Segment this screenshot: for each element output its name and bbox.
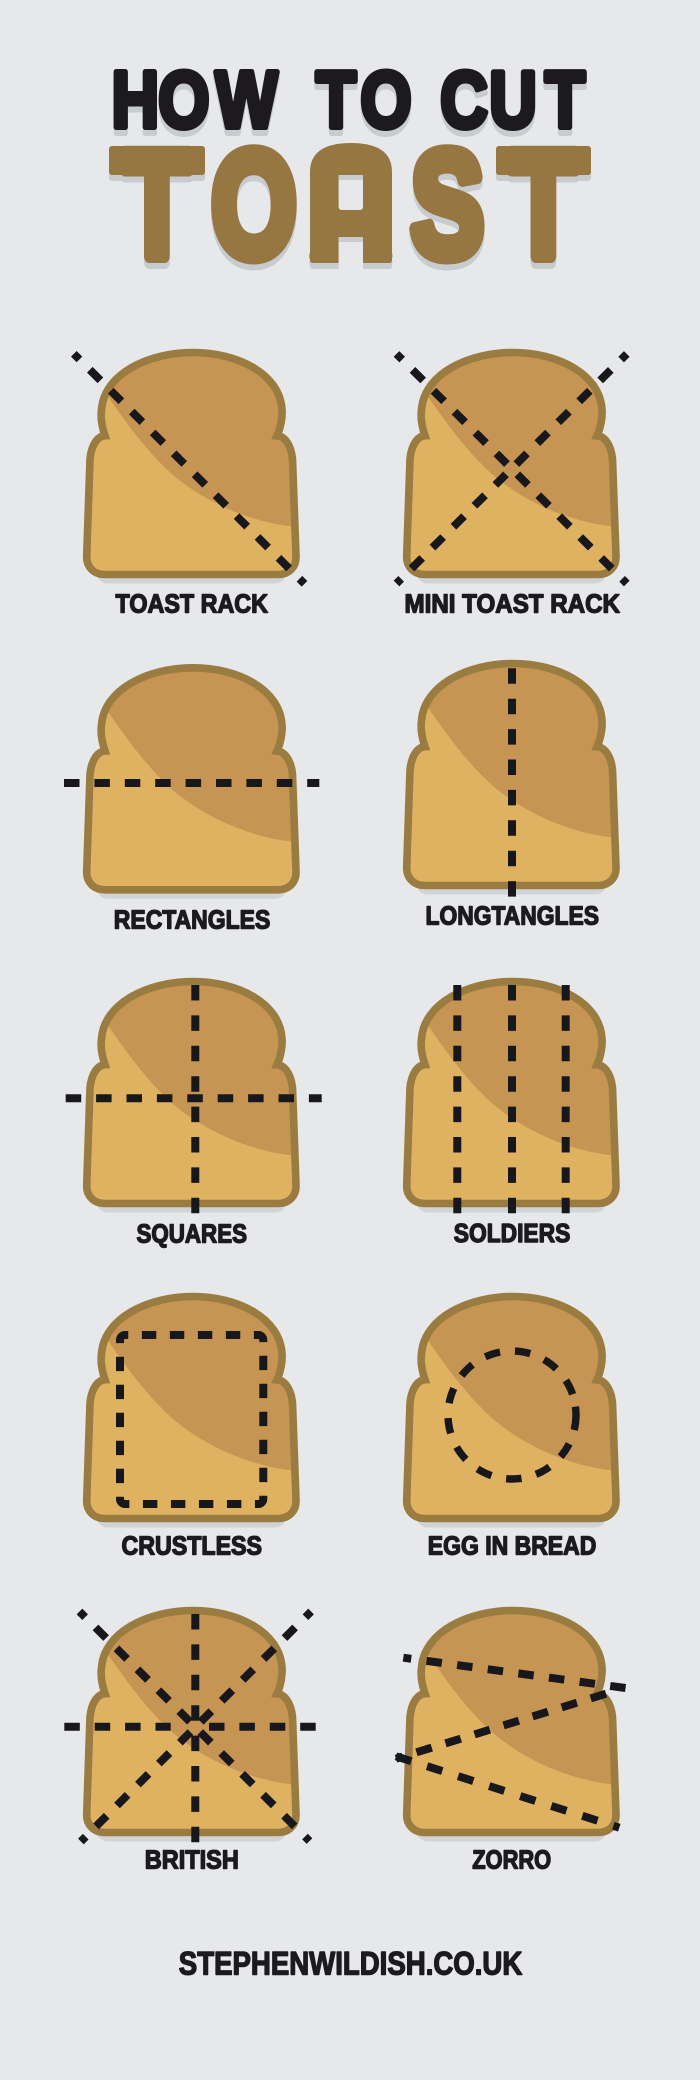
toast slice <box>87 349 303 584</box>
label: LONGTANGLES <box>426 900 599 930</box>
title line: toast: TOAST <box>124 120 577 288</box>
cut lines <box>457 985 566 1213</box>
cut lines <box>64 779 319 787</box>
cut lines <box>74 354 304 584</box>
toast slice <box>87 978 303 1212</box>
cut lines <box>508 668 516 897</box>
footer url: STEPHENWILDISH.CO.UK <box>179 1945 522 1981</box>
label: BRITISH <box>145 1845 239 1875</box>
cut lines <box>120 1335 263 1504</box>
toast slice <box>87 1293 303 1528</box>
title line: how to cut: HOW TO CUT <box>112 55 585 144</box>
cut lines <box>64 1612 316 1842</box>
label: ZORRO <box>472 1845 551 1875</box>
cut lines <box>396 1658 628 1828</box>
label: MINI TOAST RACK <box>404 589 620 619</box>
panel: toast rack <box>74 349 304 619</box>
label: EGG IN BREAD <box>428 1530 596 1560</box>
panel: squares <box>66 978 322 1249</box>
panel: mini toast rack <box>396 349 627 619</box>
toast slice <box>407 1293 623 1528</box>
panel: longtangles <box>407 660 623 930</box>
toast slice <box>87 1607 303 1842</box>
cut lines <box>396 354 627 584</box>
label: SOLDIERS <box>454 1218 570 1248</box>
toast slice <box>87 664 303 899</box>
toast slice <box>407 1607 623 1842</box>
label: CRUSTLESS <box>122 1530 262 1560</box>
cut lines <box>440 1343 584 1487</box>
panel: egg in bread <box>407 1293 623 1560</box>
panel: crustless <box>87 1293 303 1560</box>
panel: rectangles <box>64 664 319 935</box>
label: SQUARES <box>136 1219 247 1249</box>
toast slice <box>407 349 623 584</box>
label: RECTANGLES <box>114 905 270 935</box>
cut lines <box>66 985 322 1213</box>
panel: british <box>64 1607 316 1875</box>
panel: zorro <box>396 1607 628 1875</box>
panel: soldiers <box>407 978 623 1248</box>
toast slice <box>407 978 623 1212</box>
toast slice <box>407 660 623 894</box>
letter A counter <box>339 175 363 270</box>
title <box>109 55 591 288</box>
label: TOAST RACK <box>116 589 268 619</box>
